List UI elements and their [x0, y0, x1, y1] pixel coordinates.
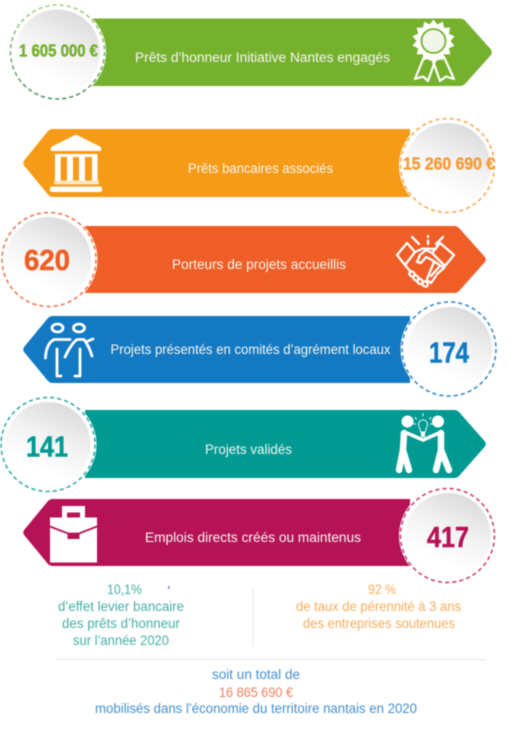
- magenta arrow banner: [23, 499, 410, 566]
- banner label: Projets présentés en comités d’agrément locaux: [110, 342, 391, 357]
- value circle: 1 605 000 €: [19, 40, 98, 60]
- panel: comités d'agrément: [23, 300, 498, 398]
- icon: two people: [46, 324, 93, 376]
- text block: effet levier: [58, 582, 184, 648]
- orange arrow banner: [23, 129, 410, 197]
- icon: briefcase: [50, 506, 97, 562]
- icon: bank building: [50, 134, 102, 192]
- red-orange arrow banner: [85, 226, 486, 293]
- value circle: 141: [26, 432, 68, 464]
- text block: pérennité: des entreprises soutenues: [303, 616, 455, 631]
- banner label: Prêts bancaires associés: [188, 161, 333, 176]
- text block: pérennité: 92 %: [368, 582, 396, 597]
- text block: total: 16 865 690 €: [219, 685, 293, 700]
- banner label: Prêts d’honneur Initiative Nantes engagés: [135, 50, 390, 65]
- banner label: Porteurs de projets accueillis: [172, 257, 346, 272]
- banner label: Emplois directs créés ou maintenus: [145, 530, 361, 545]
- value circle: [0, 396, 96, 493]
- value circle: 15 260 690 €: [403, 154, 495, 174]
- panel: prêts d'honneur: [9, 4, 492, 100]
- text block: pérennité: [296, 582, 461, 631]
- panel: prêts bancaires: [23, 117, 496, 214]
- teal arrow banner: [85, 410, 486, 478]
- value circle: 174: [429, 338, 469, 370]
- text block: total: soit un total de: [212, 667, 300, 682]
- text block: total: [95, 667, 417, 716]
- panel: emplois: [23, 487, 496, 584]
- value circle: 417: [427, 522, 469, 554]
- text block: pérennité: de taux de pérennité à 3 ans: [296, 599, 461, 614]
- value circle: 620: [24, 245, 70, 277]
- banner label: Projets validés: [205, 442, 292, 457]
- panel: projets validés: [0, 396, 486, 493]
- green arrow banner: [90, 18, 492, 86]
- value circle: [9, 4, 106, 100]
- value circle: [400, 300, 498, 398]
- value circle: [399, 117, 496, 214]
- decorative mark: [168, 586, 170, 589]
- text block: effet levier: d’effet levier bancaire: [58, 599, 184, 614]
- value circle: [0, 211, 98, 308]
- icon: handshake: [397, 236, 454, 288]
- icon: two people sharing an idea: [399, 414, 449, 470]
- blue arrow banner: [23, 316, 410, 383]
- text block: effet levier: des prêts d’honneur: [62, 616, 180, 631]
- icon: award rosette: [412, 20, 454, 81]
- text block: total: mobilisés dans l’économie du territoire nantais en 2020: [95, 701, 417, 716]
- text block: effet levier: sur l’année 2020: [73, 633, 169, 648]
- panel: porteurs de projets: [0, 211, 486, 308]
- value circle: [399, 487, 496, 584]
- text block: effet levier: 10,1%: [107, 582, 142, 597]
